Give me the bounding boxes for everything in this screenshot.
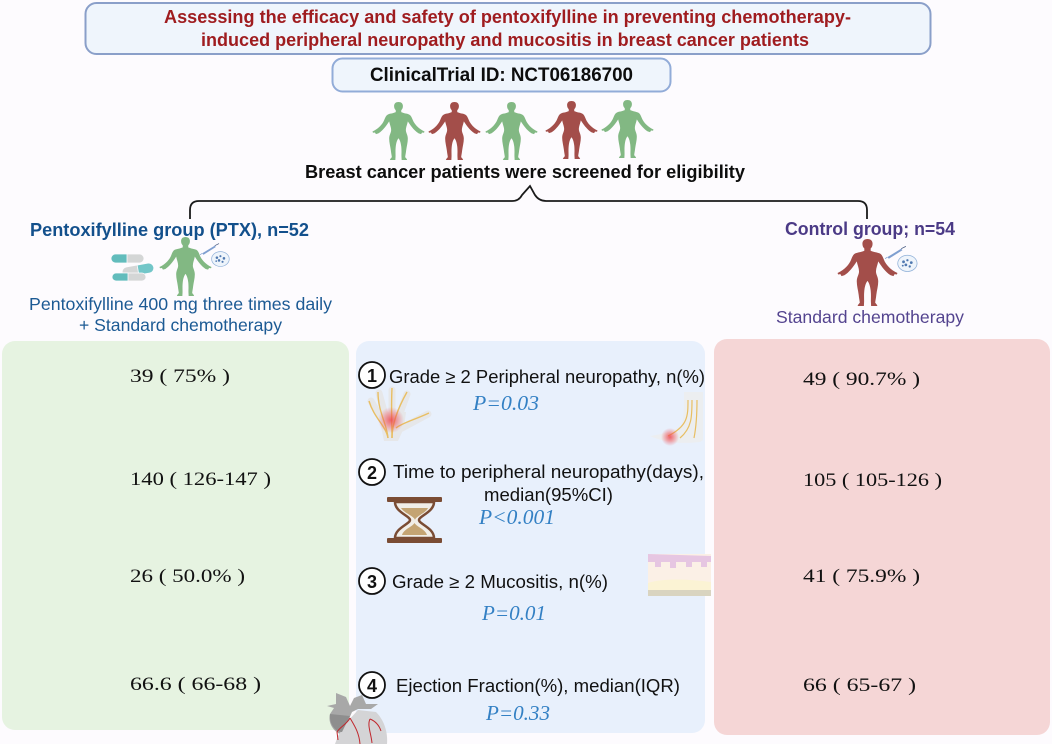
PTX regimen text: + Standard chemotherapy: [79, 315, 282, 335]
panel: outcomes: [356, 341, 705, 733]
panel: control results: 49 ( 90.7% ): [803, 369, 920, 390]
outcome 4: 4: [367, 676, 377, 696]
panel: PTX results: 39 ( 75% ): [130, 366, 230, 387]
panel: PTX results: [2, 341, 349, 730]
panel: control results: 105 ( 105-126 ): [803, 470, 942, 491]
outcome 2: 2: [367, 463, 377, 483]
icon: hourglass: [387, 497, 442, 543]
outcome 2: [359, 459, 704, 529]
panel: control results: [714, 339, 1050, 735]
clinical trial id box: [332, 58, 670, 92]
panel: PTX results: 140 ( 126-147 ): [130, 469, 271, 490]
icon: heart: [327, 693, 387, 744]
icon: pills: [111, 254, 155, 281]
icon: PTX chemotherapy dish: [200, 244, 229, 266]
panel: PTX results: 26 ( 50.0% ): [130, 566, 245, 587]
heading: control group: Control group; n=54: [785, 219, 955, 239]
icon: foot: [650, 392, 703, 446]
outcome 1: P=0.03: [472, 391, 539, 415]
panel: PTX results: 66.6 ( 66-68 ): [130, 674, 261, 695]
icon: control chemotherapy dish: [885, 246, 917, 271]
screening caption: Breast cancer patients were screened for eligibility: [305, 162, 745, 182]
outcome 1: Grade ≥ 2 Peripheral neuropathy, n(%): [389, 367, 705, 387]
icon: PTX patient: [159, 237, 212, 296]
outcome 4: [359, 672, 680, 725]
bracket connecting groups: [190, 186, 867, 219]
panel: control results: 66 ( 65-67 ): [803, 675, 916, 696]
outcome 1: 1: [367, 366, 377, 386]
title box: [86, 3, 930, 54]
PTX regimen text: Pentoxifylline 400 mg three times daily: [29, 294, 332, 314]
outcome 4: Ejection Fraction(%), median(IQR): [396, 676, 680, 696]
outcome 3: 3: [367, 572, 377, 592]
outcome 2: median(95%CI): [484, 485, 613, 505]
panel: control results: 41 ( 75.9% ): [803, 566, 920, 587]
title box: induced peripheral neuropathy and mucositis in breast cancer patients: [201, 29, 809, 50]
outcome 2: Time to peripheral neuropathy(days),: [393, 462, 704, 482]
heading: pentoxifylline group: Pentoxifylline group (PTX), n=52: [30, 220, 309, 240]
icon: control patient: [838, 239, 897, 306]
outcome 3: P=0.01: [481, 601, 546, 625]
icon: mucosa tissue: [648, 554, 711, 596]
clinical trial id box: ClinicalTrial ID: NCT06186700: [370, 65, 633, 86]
outcome 3: Grade ≥ 2 Mucositis, n(%): [392, 572, 608, 592]
outcome 4: P=0.33: [485, 701, 550, 725]
control regimen text: Standard chemotherapy: [776, 307, 964, 327]
outcome 1: [359, 362, 705, 415]
title box: Assessing the efficacy and safety of pentoxifylline in preventing chemotherapy-: [164, 6, 851, 27]
icon: hand: [369, 388, 429, 441]
outcome 3: [359, 568, 608, 625]
screened patient figures: [372, 100, 654, 160]
PTX regimen text: [29, 294, 332, 335]
outcome 2: P<0.001: [478, 505, 555, 529]
